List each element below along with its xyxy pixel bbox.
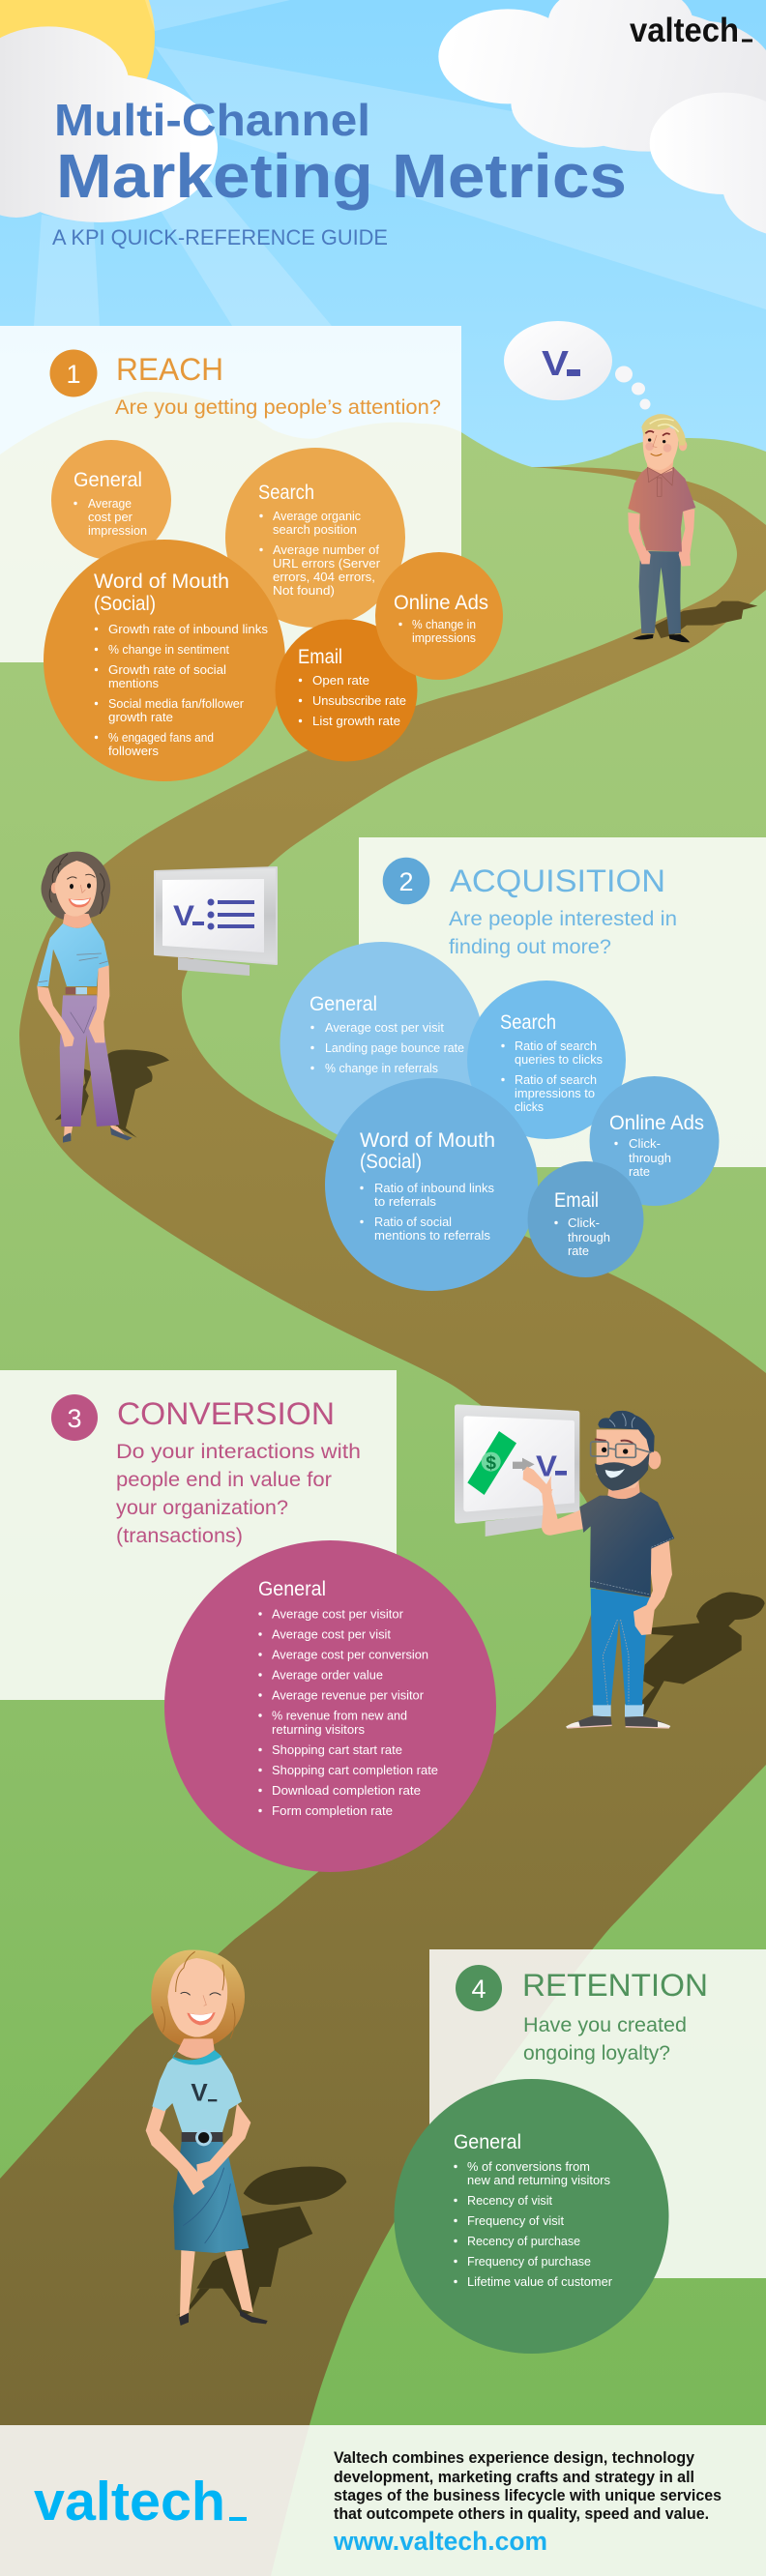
bubble: reach search: Search: [258, 482, 314, 504]
bubble: acquisition general: Average cost per visit: [325, 1020, 444, 1035]
bubble: reach word of mouth: growth rate: [108, 710, 173, 724]
sun: [0, 0, 155, 153]
number badge 4: 4: [471, 1975, 486, 2004]
logo: valtech top: valtech: [630, 12, 739, 49]
question: acquisition: [449, 908, 677, 958]
bubble: acquisition word of mouth: (Social): [360, 1151, 422, 1173]
bubble: acquisition word of mouth: Ratio of social: [374, 1215, 452, 1229]
question: acquisition: finding out more?: [449, 936, 611, 958]
bubble: retention general: [395, 2079, 669, 2354]
character: smiling woman in blue skirt: [146, 1950, 346, 2326]
logo: valtech footer: valtech: [34, 2471, 225, 2532]
bubble: reach word of mouth: Word of Mouth: [94, 571, 229, 593]
bubble: reach word of mouth: (Social): [94, 593, 156, 615]
number badge 3: [51, 1394, 98, 1441]
panel: conversion: [0, 1370, 397, 1700]
bubble: reach email: [275, 619, 418, 762]
bubble: reach search: [225, 448, 405, 628]
bubble: reach search: URL errors (Server: [273, 556, 381, 571]
bubble: acquisition search: clicks: [515, 1099, 544, 1114]
sun rays: [34, 0, 766, 326]
bubble: conversion general: Average order value: [272, 1667, 383, 1683]
monitor: V list: V: [173, 900, 194, 932]
bubble: acquisition search: queries to clicks: [515, 1052, 603, 1067]
bubble: acquisition online ads: through: [629, 1151, 671, 1165]
number badge 1: 1: [66, 360, 81, 389]
bubble: retention general: % of conversions from: [467, 2159, 590, 2174]
number badge 3: 3: [67, 1404, 82, 1433]
bubble: conversion general: Form completion rate: [272, 1803, 393, 1818]
bubble: conversion general: returning visitors: [272, 1722, 365, 1737]
character: bearded man: [523, 1411, 765, 1729]
panel: acquisition: [359, 837, 766, 1167]
bubble: acquisition online ads: rate: [629, 1164, 650, 1179]
bubble: conversion general: Average cost per visit: [272, 1626, 391, 1642]
question: conversion: (transactions): [116, 1525, 243, 1547]
bubble: conversion general: Shopping cart start rate: [272, 1742, 402, 1757]
bubble: reach email: Open rate: [312, 673, 369, 688]
bubble: conversion general: Average revenue per visitor: [272, 1688, 425, 1702]
bubble: acquisition email: Click-: [568, 1215, 600, 1230]
footer description: development, marketing crafts and strategy in all: [334, 2468, 694, 2486]
question: reach: Are you getting people’s attention?: [115, 396, 441, 419]
bubble: acquisition search: Ratio of search: [515, 1072, 597, 1087]
bubble: acquisition general: % change in referrals: [325, 1061, 438, 1075]
bubble: reach general: [51, 440, 171, 560]
character: woman with purple trousers: [37, 852, 169, 1143]
bubble: reach search: Not found): [273, 583, 335, 598]
title: [52, 95, 627, 249]
monitor: money to V: V: [536, 1450, 558, 1483]
bubble: reach online ads: Online Ads: [394, 592, 488, 614]
thought bubble: [504, 321, 650, 410]
bubble: acquisition general: Landing page bounce rate: [325, 1040, 464, 1055]
bubble: reach online ads: impressions: [412, 630, 476, 645]
bubble: acquisition online ads: Click-: [629, 1136, 661, 1151]
bubble: acquisition search: Ratio of search: [515, 1039, 597, 1053]
question: conversion: Do your interactions with: [116, 1441, 361, 1463]
bubble: conversion general: Average cost per conversion: [272, 1648, 428, 1661]
bubble: reach email: Email: [298, 646, 342, 668]
bubble: retention general: Frequency of visit: [467, 2213, 564, 2228]
bubble: acquisition email: [528, 1161, 644, 1277]
footer description: [334, 2448, 722, 2523]
bubble: reach email: Unsubscribe rate: [312, 693, 406, 708]
bubble: reach general: Average: [88, 496, 132, 511]
heading: retention: RETENTION: [522, 1968, 708, 2003]
sky background: [0, 0, 766, 503]
bubble: conversion general: Shopping cart completion rate: [272, 1763, 438, 1777]
bubble: retention general: Frequency of purchase: [467, 2254, 591, 2269]
panel: reach: [0, 326, 461, 662]
bubble: conversion general: Download completion rate: [272, 1783, 421, 1798]
bubble: reach search: search position: [273, 522, 357, 537]
footer: [0, 2425, 766, 2576]
number badge 4: [456, 1965, 502, 2011]
heading: acquisition: ACQUISITION: [450, 864, 665, 898]
question: retention: [523, 2014, 687, 2064]
bubble: reach word of mouth: [44, 540, 285, 781]
bubble: reach general: General: [74, 469, 142, 491]
number badge 2: [383, 858, 429, 904]
title: Marketing Metrics: [56, 141, 627, 211]
panel: retention: [429, 1949, 766, 2278]
bubble: reach general: impression: [88, 523, 147, 538]
bubble: retention general: General: [454, 2131, 521, 2153]
bubble: reach word of mouth: % change in sentiment: [108, 642, 229, 657]
bubble: acquisition email: Email: [554, 1189, 599, 1212]
bubble: retention general: Lifetime value of customer: [467, 2274, 613, 2289]
bubble: reach search: errors, 404 errors,: [273, 570, 375, 584]
bubble: reach search: Average number of: [273, 542, 379, 557]
question: retention: Have you created: [523, 2014, 687, 2036]
bubble: reach word of mouth: % engaged fans and: [108, 730, 214, 745]
bubble: conversion general: General: [258, 1578, 326, 1600]
bubble: reach search: Average organic: [273, 509, 361, 523]
character: smiling woman in blue skirt: V: [191, 2079, 208, 2106]
bubble: acquisition word of mouth: mentions to referrals: [374, 1228, 490, 1243]
bubble: acquisition word of mouth: Word of Mouth: [360, 1129, 495, 1152]
bubble: acquisition general: [280, 942, 484, 1145]
bubble: acquisition email: through: [568, 1230, 610, 1244]
cloud right: [438, 0, 766, 237]
bubble: acquisition online ads: [590, 1076, 720, 1206]
question: conversion: [116, 1441, 361, 1547]
bubble: retention general: new and returning visitors: [467, 2173, 610, 2187]
title: Multi-Channel: [54, 95, 370, 145]
bubble: reach word of mouth: followers: [108, 744, 160, 758]
bubble: conversion general: % revenue from new and: [272, 1708, 407, 1723]
question: conversion: your organization?: [116, 1497, 288, 1519]
bubble: acquisition email: rate: [568, 1244, 589, 1258]
bubble: acquisition search: [467, 981, 626, 1139]
number badge 2: 2: [398, 867, 414, 896]
monitor: money to V: [455, 1404, 579, 1537]
title: A KPI QUICK-REFERENCE GUIDE: [52, 225, 388, 249]
footer url: www.valtech.com: [333, 2527, 547, 2556]
heading: conversion: CONVERSION: [117, 1396, 335, 1431]
bubble: acquisition online ads: Online Ads: [609, 1112, 704, 1134]
bubble: retention general: Recency of purchase: [467, 2234, 580, 2248]
footer description: that outcompete others in quality, speed and value.: [334, 2504, 709, 2523]
bubble: acquisition search: Search: [500, 1011, 556, 1034]
bubble: reach online ads: % change in: [412, 617, 476, 631]
monitor: money to V: $: [486, 1453, 496, 1474]
thought bubble: V: [542, 343, 569, 383]
bubble: conversion general: [164, 1540, 496, 1872]
monitor: V list: [155, 867, 277, 976]
bubble: reach word of mouth: Growth rate of social: [108, 662, 226, 677]
character: man with thought bubble: [628, 414, 757, 642]
bubble: reach word of mouth: mentions: [108, 676, 159, 690]
cloud left: [0, 26, 218, 222]
bubble: reach general: cost per: [88, 510, 133, 524]
question: retention: ongoing loyalty?: [523, 2042, 670, 2064]
bubble: reach email: List growth rate: [312, 714, 400, 728]
bubble: acquisition word of mouth: to referrals: [374, 1194, 437, 1209]
bubble: acquisition search: impressions to: [515, 1086, 595, 1100]
question: acquisition: Are people interested in: [449, 908, 677, 930]
bubble: acquisition general: General: [309, 993, 377, 1015]
heading: reach: REACH: [116, 352, 223, 387]
footer description: Valtech combines experience design, technology: [334, 2448, 695, 2467]
bubble: retention general: Recency of visit: [467, 2193, 552, 2208]
bubble: reach online ads: [375, 552, 503, 680]
question: conversion: people end in value for: [116, 1469, 332, 1491]
bubble: acquisition word of mouth: [325, 1078, 538, 1291]
bubble: reach word of mouth: Growth rate of inbound links: [108, 622, 268, 636]
number badge 1: [50, 350, 97, 396]
footer description: stages of the business lifecycle with unique services: [334, 2486, 722, 2504]
bubble: acquisition word of mouth: Ratio of inbound links: [374, 1181, 494, 1195]
bubble: reach word of mouth: Social media fan/follower: [108, 696, 245, 711]
bubble: conversion general: Average cost per visitor: [272, 1607, 404, 1621]
